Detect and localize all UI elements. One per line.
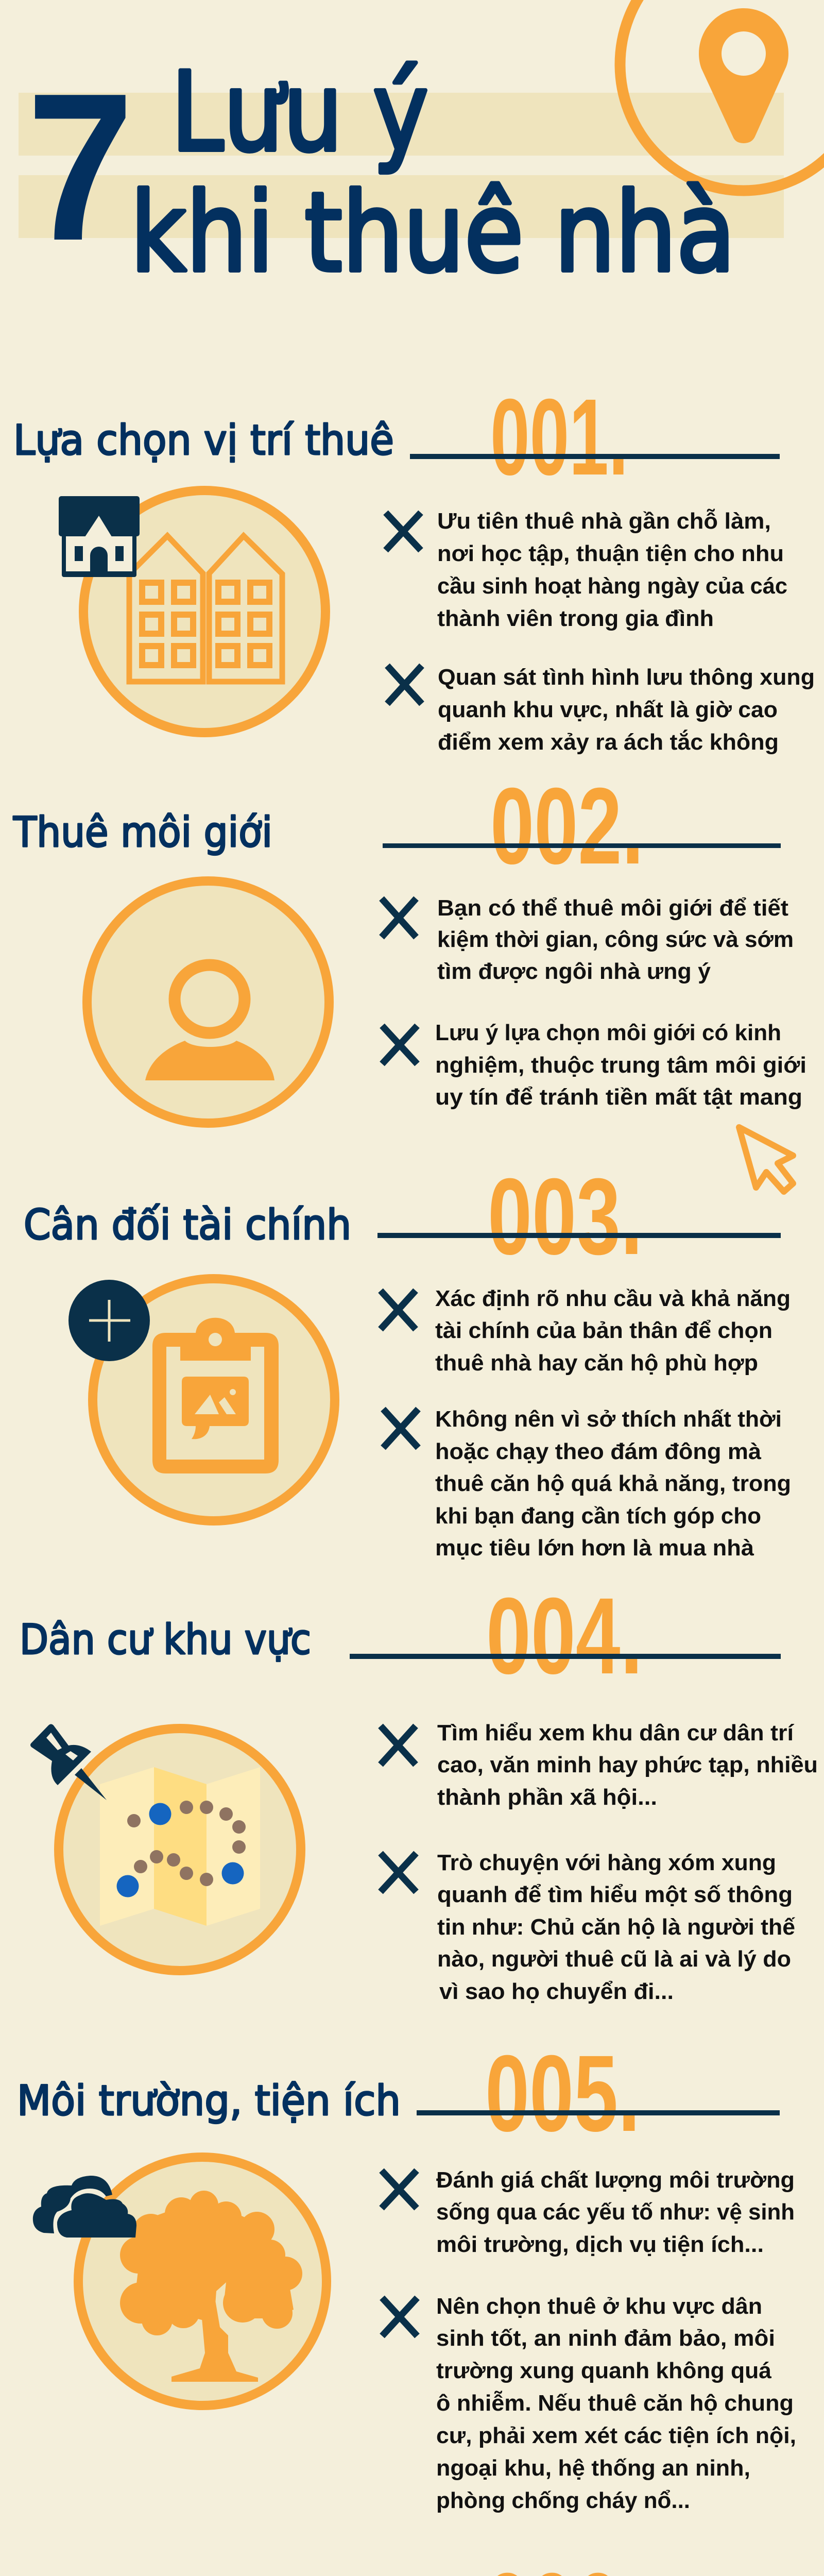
- icon: cursor: [739, 1127, 793, 1192]
- section 4: residents: [20, 1575, 818, 2004]
- heading: Lựa chọn vị trí thuê: [13, 416, 394, 464]
- icon: plus badge: [68, 1280, 150, 1361]
- bullet 1: nơi học tập, thuận tiện cho nhu: [437, 541, 784, 566]
- number 004: 004.: [486, 1575, 643, 1697]
- bullet 2: cư, phải xem xét các tiện ích nội,: [436, 2423, 796, 2448]
- bullet 1: Tìm hiểu xem khu dân cư dân trí: [437, 1720, 795, 1745]
- bullet 2: [382, 1020, 806, 1110]
- heading: Dân cư khu vực: [20, 1616, 311, 1664]
- bullet 1: cao, văn minh hay phức tạp, nhiều: [437, 1752, 818, 1777]
- bullet 2: hoặc chạy theo đám đông mà: [435, 1439, 762, 1464]
- bullet 1: thành viên trong gia đình: [437, 606, 714, 631]
- bullet 2: ngoại khu, hệ thống an ninh,: [436, 2455, 750, 2481]
- bullet 1: thành phần xã hội...: [437, 1785, 657, 1810]
- number 005: 005.: [485, 2032, 640, 2154]
- heading: Môi trường, tiện ích: [17, 2077, 401, 2125]
- bullet 2: nào, người thuê cũ là ai và lý do: [437, 1946, 791, 1972]
- heading: Cân đối tài chính: [24, 1201, 351, 1249]
- icon: location pin in ring: [620, 0, 824, 191]
- icon: clouds: [33, 2176, 136, 2238]
- bullet 1: [382, 2167, 795, 2257]
- title line 1: Lưu ý: [171, 48, 428, 176]
- bullet 2: Trò chuyện với hàng xóm xung: [437, 1850, 776, 1875]
- bullet 2: khi bạn đang cần tích góp cho: [435, 1503, 761, 1529]
- bullet 2: sinh tốt, an ninh đảm bảo, môi: [436, 2326, 775, 2351]
- section 2: broker: [13, 765, 806, 1192]
- bullet 2: tin như: Chủ căn hộ là người thế: [437, 1914, 796, 1940]
- bullet 1: tài chính của bản thân để chọn: [435, 1318, 772, 1343]
- bullet 1: sống qua các yếu tố như: vệ sinh: [436, 2199, 795, 2225]
- bullet 1: Đánh giá chất lượng môi trường: [436, 2167, 795, 2193]
- icon: map in circle: [59, 1728, 301, 1971]
- bullet 2: mục tiêu lớn hơn là mua nhà: [435, 1535, 754, 1561]
- bullet 1: [382, 895, 794, 984]
- title number 7: 7: [27, 50, 134, 284]
- number 001: 001.: [490, 376, 628, 498]
- bullet 2: quanh để tìm hiểu một số thông: [437, 1882, 793, 1907]
- bullet 1: [381, 1286, 791, 1376]
- bullet 2: [387, 665, 815, 755]
- bullet 2: trường xung quanh không quá: [436, 2358, 772, 2383]
- bullet 2: nghiệm, thuộc trung tâm môi giới: [435, 1053, 806, 1078]
- bullet 2: thuê căn hộ quá khả năng, trong: [435, 1471, 791, 1496]
- bullet 1: [386, 508, 787, 631]
- bullet 2: [383, 1406, 791, 1561]
- bullet 1: kiệm thời gian, công sức và sớm: [437, 927, 794, 952]
- icon: tree in circle: [78, 2157, 327, 2405]
- title banner: [19, 0, 824, 296]
- bullet 1: cầu sinh hoạt hàng ngày của các: [437, 573, 787, 599]
- icon: person in circle: [87, 881, 329, 1123]
- bullet 2: Nên chọn thuê ở khu vực dân: [436, 2294, 762, 2319]
- bullet 1: [381, 1720, 818, 1810]
- bullet 2: phòng chống cháy nổ...: [436, 2488, 690, 2513]
- icon: apartment building in circle: [83, 490, 325, 733]
- bullet 1: Ưu tiên thuê nhà gần chỗ làm,: [437, 508, 771, 534]
- bullet 2: [381, 1850, 796, 2004]
- icon: small house: [59, 496, 140, 577]
- heading: Thuê môi giới: [13, 808, 272, 856]
- bullet 2: quanh khu vực, nhất là giờ cao: [438, 697, 778, 722]
- section 1: location: [13, 376, 815, 755]
- bullet 1: thuê nhà hay căn hộ phù hợp: [435, 1350, 758, 1376]
- bullet 2: Lưu ý lựa chọn môi giới có kinh: [435, 1020, 781, 1045]
- number 002: 002.: [490, 765, 644, 887]
- section 5: environment: [17, 2032, 796, 2513]
- bullet 2: Không nên vì sở thích nhất thời: [435, 1406, 782, 1432]
- section 3: finance: [24, 1156, 791, 1561]
- bullet 2: Quan sát tình hình lưu thông xung: [438, 665, 815, 690]
- bullet 2: vì sao họ chuyển đi...: [439, 1979, 674, 2004]
- bullet 2: ô nhiễm. Nếu thuê căn hộ chung: [436, 2390, 794, 2416]
- icon: push pin: [30, 1724, 107, 1800]
- bullet 2: uy tín để tránh tiền mất tật mang: [435, 1084, 802, 1110]
- bullet 2: [382, 2294, 796, 2513]
- bullet 1: tìm được ngôi nhà ưng ý: [437, 959, 711, 984]
- bullet 1: Bạn có thể thuê môi giới để tiết: [437, 895, 788, 921]
- bullet 2: điểm xem xảy ra ách tắc không: [438, 729, 779, 755]
- bullet 1: Xác định rõ nhu cầu và khả năng: [435, 1286, 791, 1311]
- icon: clipboard in circle: [93, 1279, 335, 1521]
- number 003: 003.: [488, 1156, 643, 1277]
- bullet 1: môi trường, dịch vụ tiện ích...: [436, 2232, 764, 2257]
- title line 2: khi thuê nhà: [130, 169, 735, 296]
